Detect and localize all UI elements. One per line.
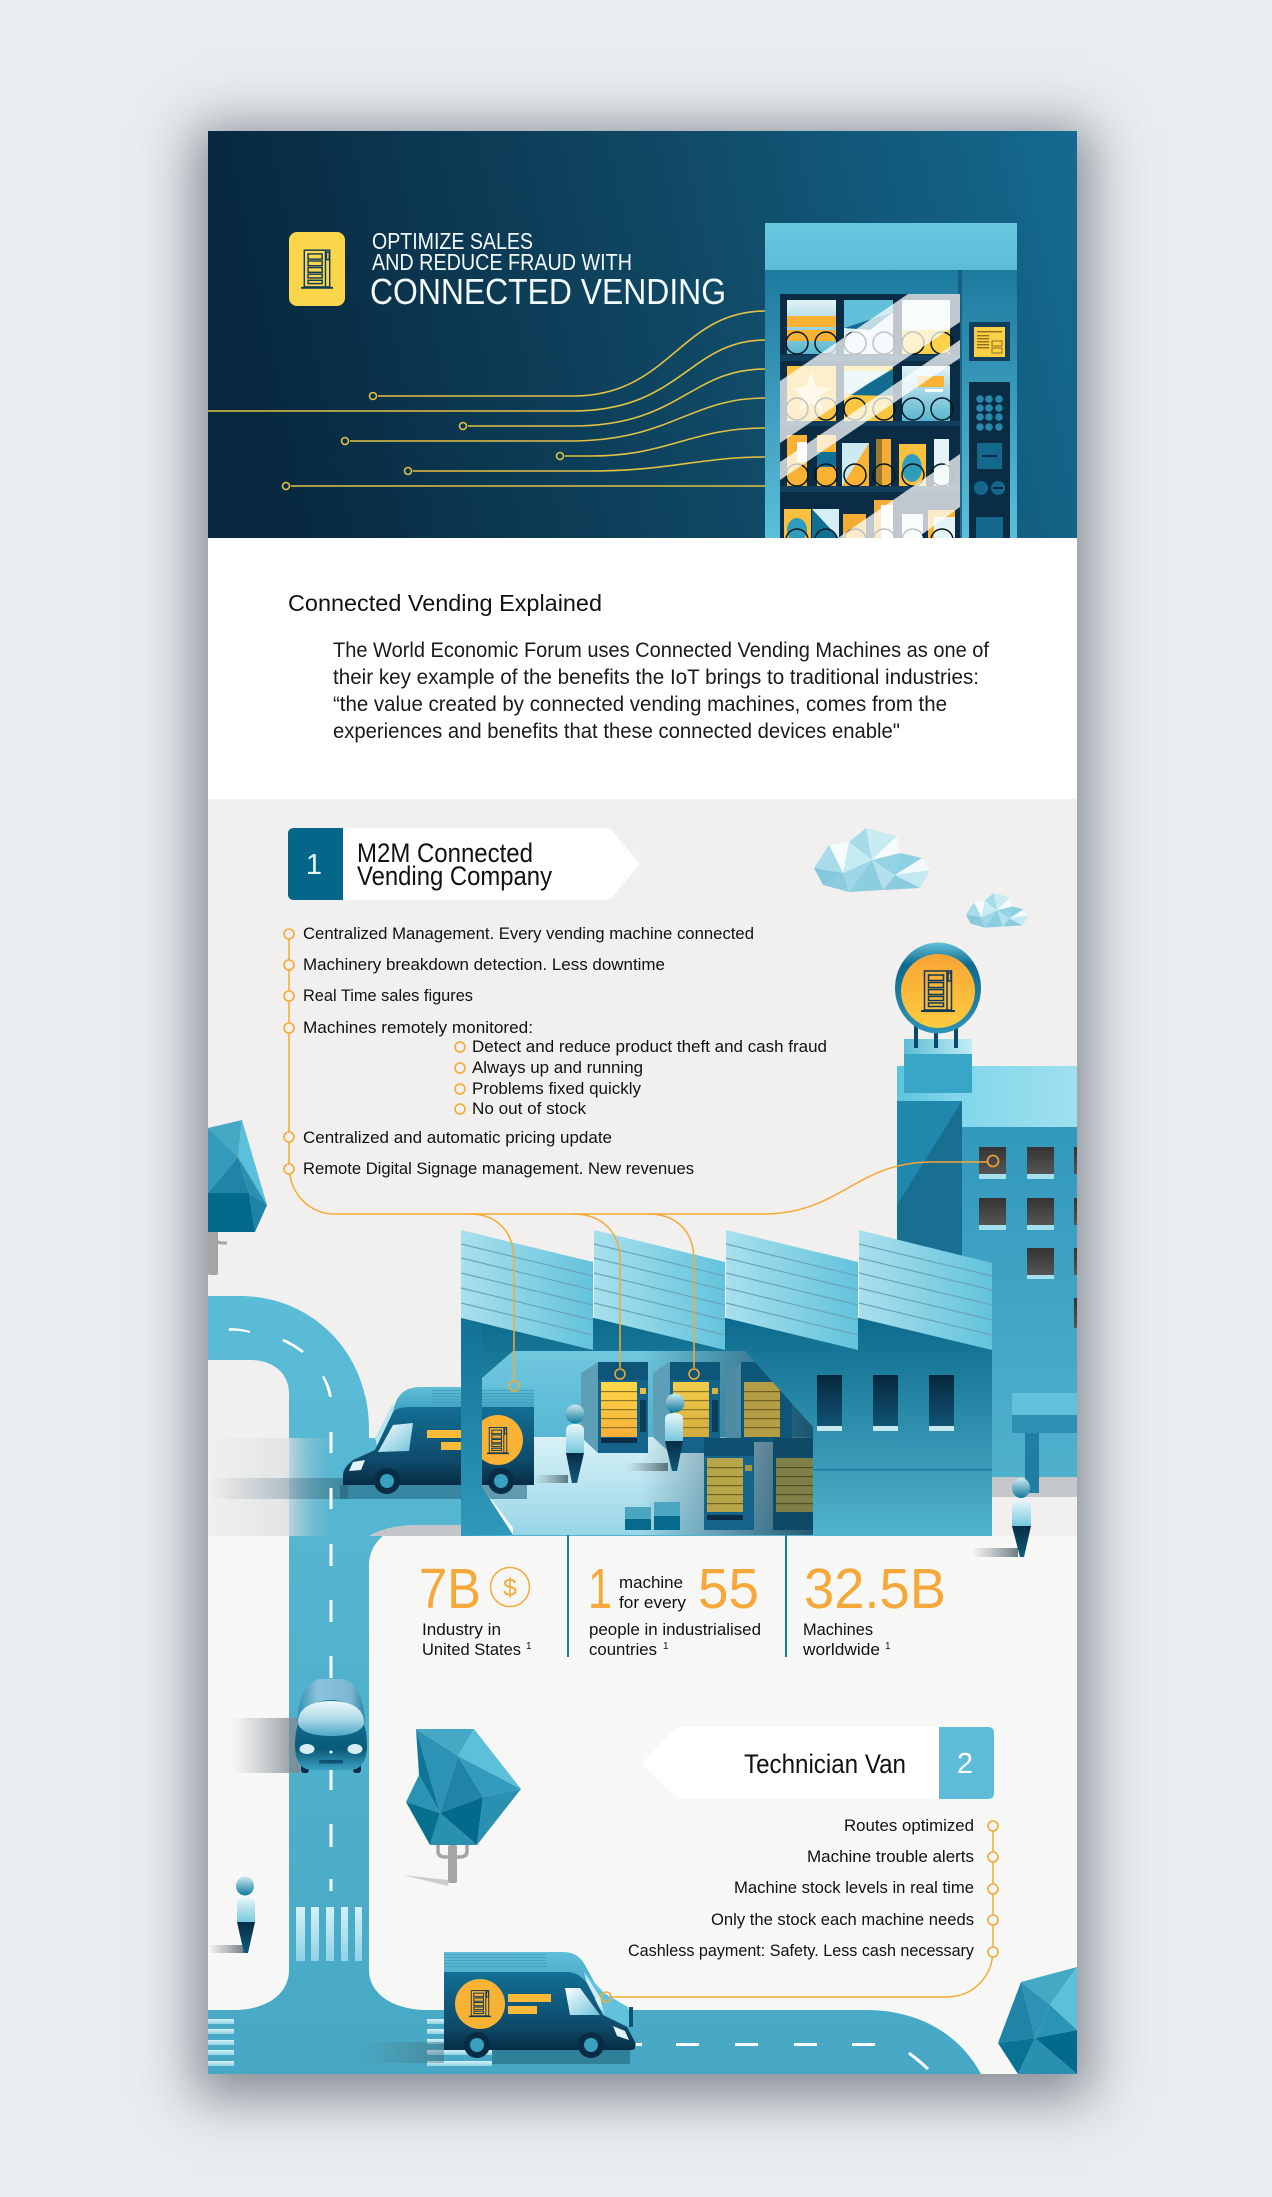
building: office bbox=[895, 942, 1077, 1497]
road markings bbox=[229, 1328, 929, 2070]
list: company benefits: Always up and running bbox=[472, 1059, 643, 1077]
person bottom-left bbox=[208, 1876, 255, 1953]
stat: 1 machine for every 55: machine bbox=[619, 1574, 683, 1592]
intro paragraph bbox=[333, 639, 989, 743]
icon: vending machine badge bbox=[289, 232, 345, 306]
van at factory bbox=[340, 1387, 534, 1499]
badge 1 bbox=[288, 828, 639, 900]
title bbox=[370, 228, 726, 312]
stat: 32.5B machines: 1 bbox=[885, 1641, 891, 1652]
machine 1 bbox=[581, 1362, 648, 1453]
stat: 1 machine for every 55: people in industrialised bbox=[589, 1621, 761, 1639]
list: company benefits: Real Time sales figures bbox=[303, 987, 473, 1005]
header panel bbox=[208, 131, 1077, 551]
stat: 1 machine for every 55 bbox=[590, 1569, 760, 1655]
boxes bbox=[625, 1502, 680, 1530]
intro paragraph: The World Economic Forum uses Connected Vending Machines as one of bbox=[333, 639, 989, 662]
tree centre bbox=[403, 1729, 521, 1886]
intro paragraph: “the value created by connected vending machines, comes from the bbox=[333, 693, 947, 716]
machine 4 bbox=[704, 1438, 754, 1530]
list: company benefits bbox=[284, 925, 998, 1214]
list: technician van benefits: Cashless payment: Safety. Less cash necessary bbox=[628, 1942, 975, 1960]
badge 2 bbox=[643, 1727, 994, 1799]
stat: 7B industry: United States bbox=[422, 1641, 521, 1659]
badge 2: 2 bbox=[957, 1748, 973, 1780]
technician van bbox=[355, 1952, 635, 2064]
stat: 1 machine for every 55: countries bbox=[589, 1641, 657, 1659]
stat: 1 machine for every 55: 1 bbox=[663, 1641, 669, 1652]
stats row bbox=[419, 1535, 946, 1659]
factory roofs bbox=[461, 1230, 992, 1350]
factory interior bbox=[482, 1351, 813, 1535]
list: technician van benefits: Only the stock each machine needs bbox=[711, 1911, 974, 1929]
list: company benefits: Remote Digital Signage management. New revenues bbox=[303, 1160, 694, 1178]
windows bbox=[979, 1147, 1077, 1328]
list: technician van benefits: Machine trouble alerts bbox=[807, 1848, 974, 1866]
badge 2: Technician Van bbox=[744, 1749, 906, 1779]
rooftop sign bbox=[895, 942, 981, 1048]
intro paragraph: experiences and benefits that these connected devices enable" bbox=[333, 720, 900, 743]
scene panel bbox=[208, 799, 1077, 2074]
stat: 7B industry bbox=[422, 1566, 532, 1655]
connectors to factory bbox=[470, 1214, 699, 1391]
intro panel bbox=[208, 538, 1077, 799]
stat: 32.5B machines bbox=[802, 1557, 946, 1659]
machine 3 bbox=[725, 1362, 792, 1442]
person inside right bbox=[626, 1394, 684, 1471]
road bbox=[208, 1296, 981, 2074]
list: technician van benefits bbox=[601, 1817, 998, 2002]
stat: 7B industry: Industry in bbox=[422, 1621, 501, 1639]
connection wires bbox=[208, 311, 765, 490]
products bbox=[784, 300, 955, 542]
list: company benefits: Centralized Management. Every vending machine connected bbox=[303, 925, 754, 943]
cloud large bbox=[814, 828, 930, 892]
badge 1: M2M Connected bbox=[357, 838, 533, 868]
intro paragraph: their key example of the benefits the IoT brings to traditional industries: bbox=[333, 666, 979, 689]
badge 1: Vending Company bbox=[357, 861, 552, 891]
list: technician van benefits: Routes optimized bbox=[844, 1817, 974, 1835]
list: company benefits: Problems fixed quickly bbox=[472, 1080, 642, 1098]
glass reflection bbox=[780, 294, 960, 538]
stat: 32.5B machines: 32.5B bbox=[804, 1557, 946, 1621]
stat: 1 machine for every 55: 1 bbox=[588, 1557, 612, 1621]
list: company benefits: No out of stock bbox=[472, 1100, 587, 1118]
control panel bbox=[969, 322, 1010, 538]
badge 1: 1 bbox=[306, 849, 322, 881]
stat: 32.5B machines: Machines bbox=[803, 1621, 873, 1639]
list: company benefits: Detect and reduce product theft and cash fraud bbox=[472, 1038, 827, 1056]
illustration: vending machine bbox=[765, 223, 1017, 551]
cloud small bbox=[966, 893, 1028, 928]
intro heading: Connected Vending Explained bbox=[288, 590, 602, 616]
machine 5 bbox=[773, 1438, 813, 1530]
stat: 7B industry: $ bbox=[503, 1574, 517, 1602]
stat: 32.5B machines: worldwide bbox=[802, 1641, 880, 1659]
road speed blur bbox=[208, 1438, 461, 1540]
stat: 7B industry: 7B bbox=[419, 1557, 481, 1621]
stat: 1 machine for every 55: 55 bbox=[698, 1557, 759, 1621]
list: technician van benefits: Machine stock levels in real time bbox=[734, 1879, 974, 1897]
building: factory bbox=[340, 1214, 992, 1536]
list: company benefits: Machinery breakdown detection. Less downtime bbox=[303, 956, 665, 974]
person right bbox=[972, 1478, 1031, 1557]
factory pillar bbox=[461, 1318, 513, 1536]
entrance canopy bbox=[992, 1393, 1077, 1497]
stat: 1 machine for every 55: for every bbox=[619, 1594, 687, 1612]
title: CONNECTED VENDING bbox=[370, 271, 726, 312]
tree top-left bbox=[208, 1120, 267, 1275]
title: OPTIMIZE SALES bbox=[372, 228, 533, 254]
factory windows bbox=[817, 1375, 954, 1431]
list: company benefits: Centralized and automatic pricing update bbox=[303, 1129, 612, 1147]
dispensing coils bbox=[786, 332, 953, 551]
list: company benefits: Machines remotely monitored: bbox=[303, 1019, 533, 1037]
tree bottom-right bbox=[998, 1967, 1077, 2074]
stat: 7B industry: 1 bbox=[526, 1641, 532, 1652]
machine 2 bbox=[653, 1362, 720, 1453]
crosswalks bbox=[208, 1907, 492, 2066]
title: AND REDUCE FRAUD WITH bbox=[372, 249, 632, 275]
car bbox=[232, 1679, 367, 1773]
rooftop block bbox=[904, 1039, 972, 1054]
person inside left bbox=[535, 1404, 584, 1483]
